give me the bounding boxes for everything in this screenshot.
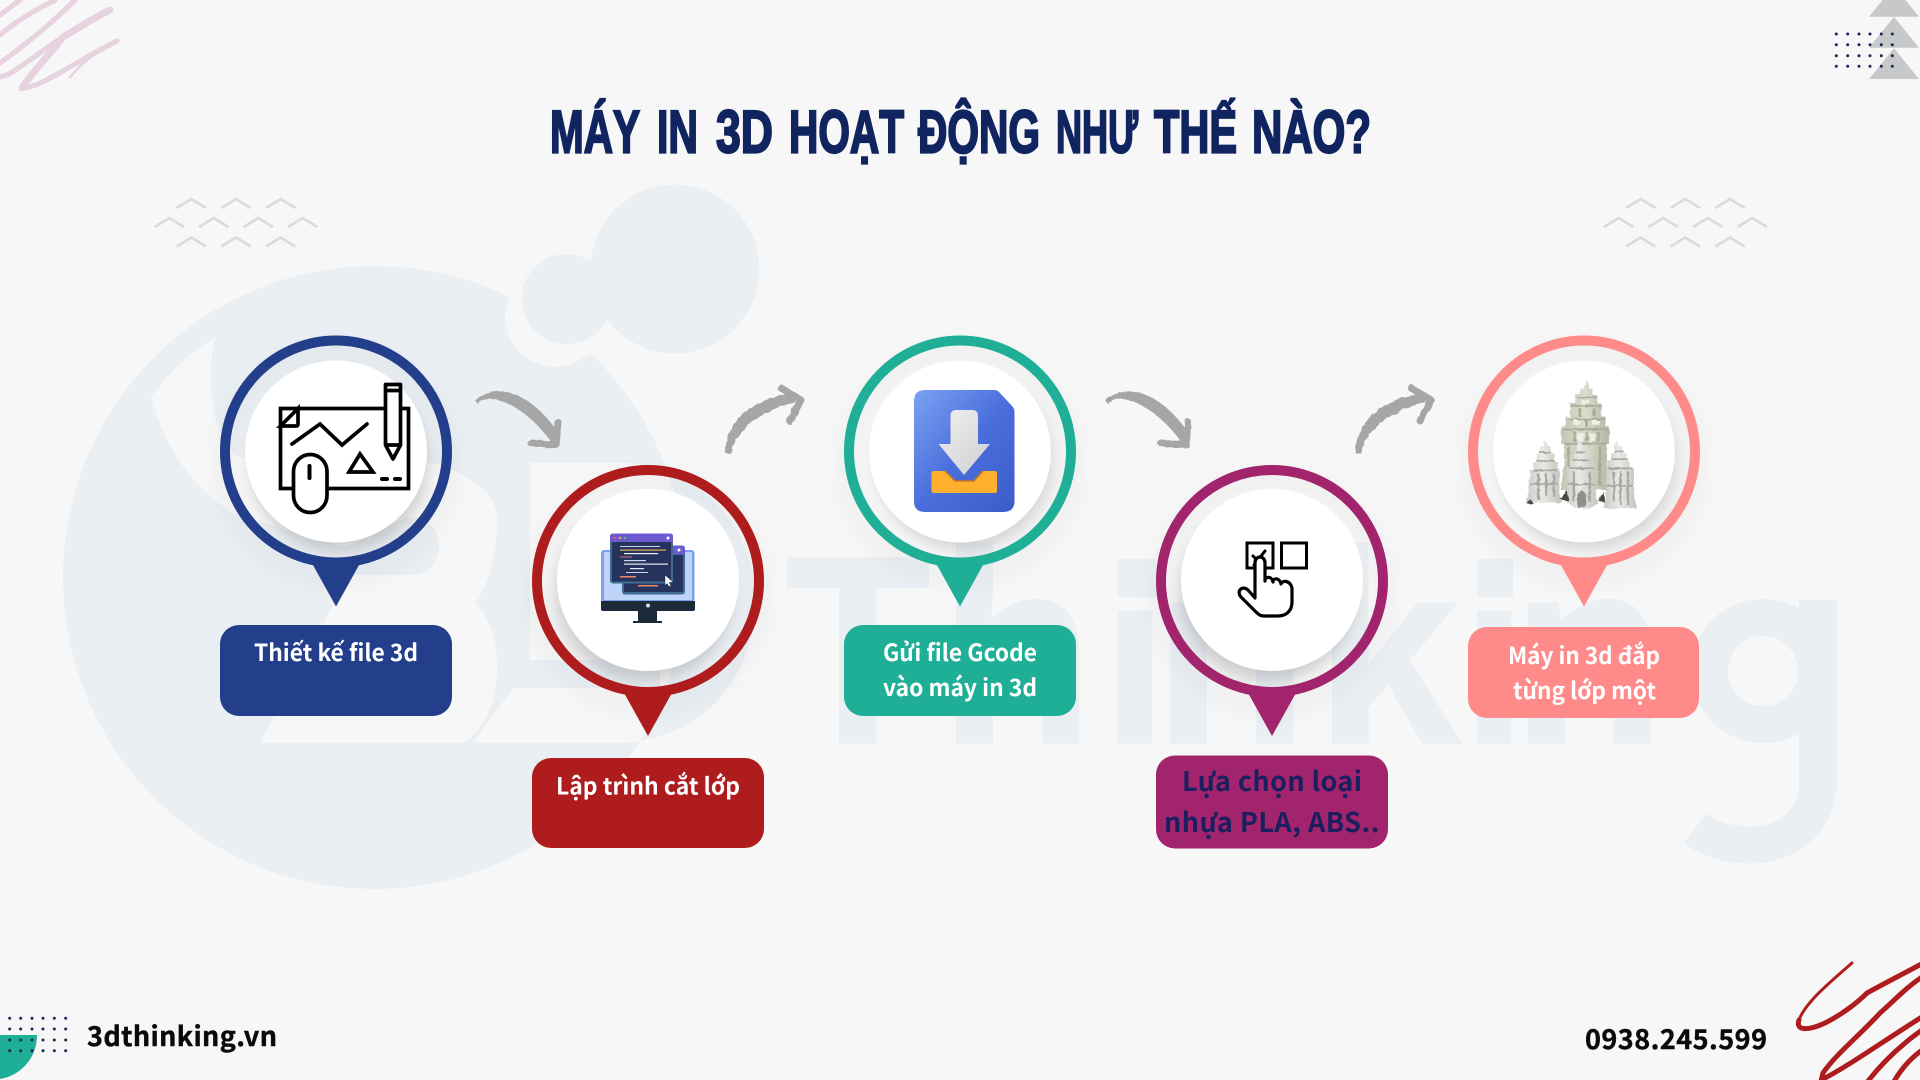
- icon: hand selecting checkbox: [1239, 543, 1306, 616]
- decoration: dot grid top right: [1835, 32, 1894, 68]
- step 5 pin: pink: [1471, 340, 1697, 606]
- step 4 pin: purple: [1159, 470, 1385, 736]
- arrow 4: [1356, 388, 1431, 453]
- step 3 label: vào máy in 3d: [883, 669, 1037, 703]
- title: IN: [657, 99, 698, 166]
- step 4 label: Lựa chọn loại: [1182, 760, 1362, 799]
- title: ĐỘNG: [918, 99, 1040, 166]
- title: [550, 99, 1371, 166]
- title: THẾ: [1154, 99, 1237, 166]
- step 5 label: [1468, 627, 1699, 718]
- decoration: grey triangles: [1869, 0, 1919, 79]
- step 3 label: Gửi file Gcode: [883, 634, 1037, 668]
- step 5 label: Máy in 3d đắp: [1508, 637, 1660, 671]
- title: MÁY: [550, 99, 640, 166]
- arrow 2: [726, 388, 801, 453]
- arrow 3: [1106, 392, 1188, 445]
- watermark logo: 3D Thinking: Thınkın: [779, 452, 1670, 816]
- decoration: chevrons right: [1604, 199, 1767, 246]
- step 4 label: nhựa PLA, ABS..: [1164, 801, 1380, 840]
- step 3 pin: teal: [847, 340, 1073, 606]
- step 5 label: từng lớp một: [1513, 672, 1656, 706]
- decoration: chevrons left: [155, 199, 317, 246]
- icon: 3D printed temple towers: [1526, 380, 1637, 509]
- arrow 1: [476, 392, 558, 445]
- step 2 label: Lập trình cắt lớp: [556, 768, 740, 802]
- icon: download file: [914, 390, 1014, 512]
- title: NHƯ: [1056, 99, 1138, 166]
- title: 3D: [716, 99, 773, 166]
- title: NÀO?: [1252, 99, 1371, 166]
- step 3 label: [844, 625, 1076, 716]
- icon: blueprint with mouse and pencil: [280, 384, 408, 512]
- title: HOẠT: [789, 99, 904, 166]
- decoration: teal quarter circle: [0, 1035, 37, 1079]
- step 2 pin: red: [535, 470, 761, 736]
- icon: monitor with code windows: [601, 534, 695, 623]
- step 1 label: Thiết kế file 3d: [254, 634, 418, 668]
- step 1 pin: blue: [223, 340, 449, 606]
- step 4 label: [1156, 756, 1388, 848]
- step 1 label: [220, 625, 452, 716]
- decoration: red scribble: [1798, 962, 1920, 1080]
- decoration: pink scribble: [0, 0, 117, 88]
- website text: 3dthinking.vn: [87, 1015, 277, 1054]
- phone number: 0938.245.599: [1585, 1018, 1767, 1057]
- watermark logo: 3D Thinking: [63, 184, 1837, 889]
- decoration: dot grid bottom left: [8, 1017, 67, 1052]
- step 2 label: [532, 758, 764, 848]
